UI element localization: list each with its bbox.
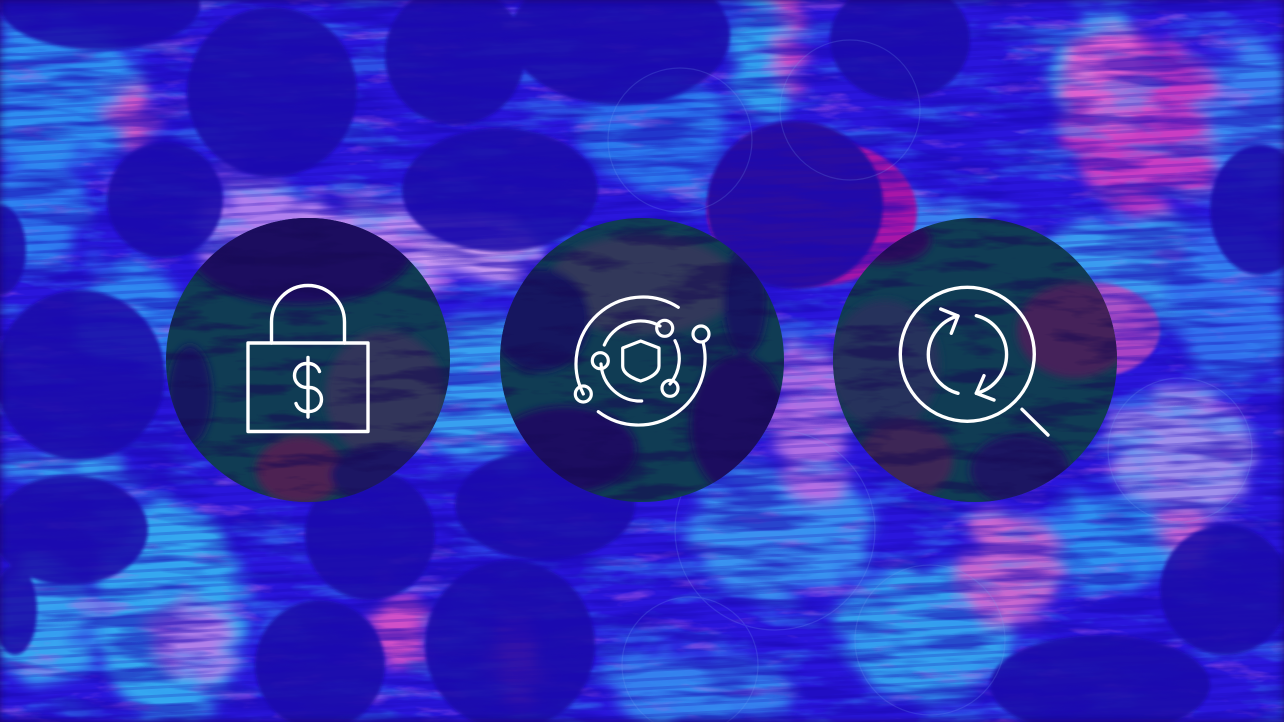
panel: three dark discs (166, 218, 1117, 502)
coin rims (608, 40, 1252, 722)
icon: magnifier with refresh arrows (900, 287, 1048, 435)
icon: shield with orbiting nodes (575, 297, 709, 425)
icon: padlock with dollar sign (248, 286, 368, 432)
magenta rim of purple coin (707, 138, 917, 286)
